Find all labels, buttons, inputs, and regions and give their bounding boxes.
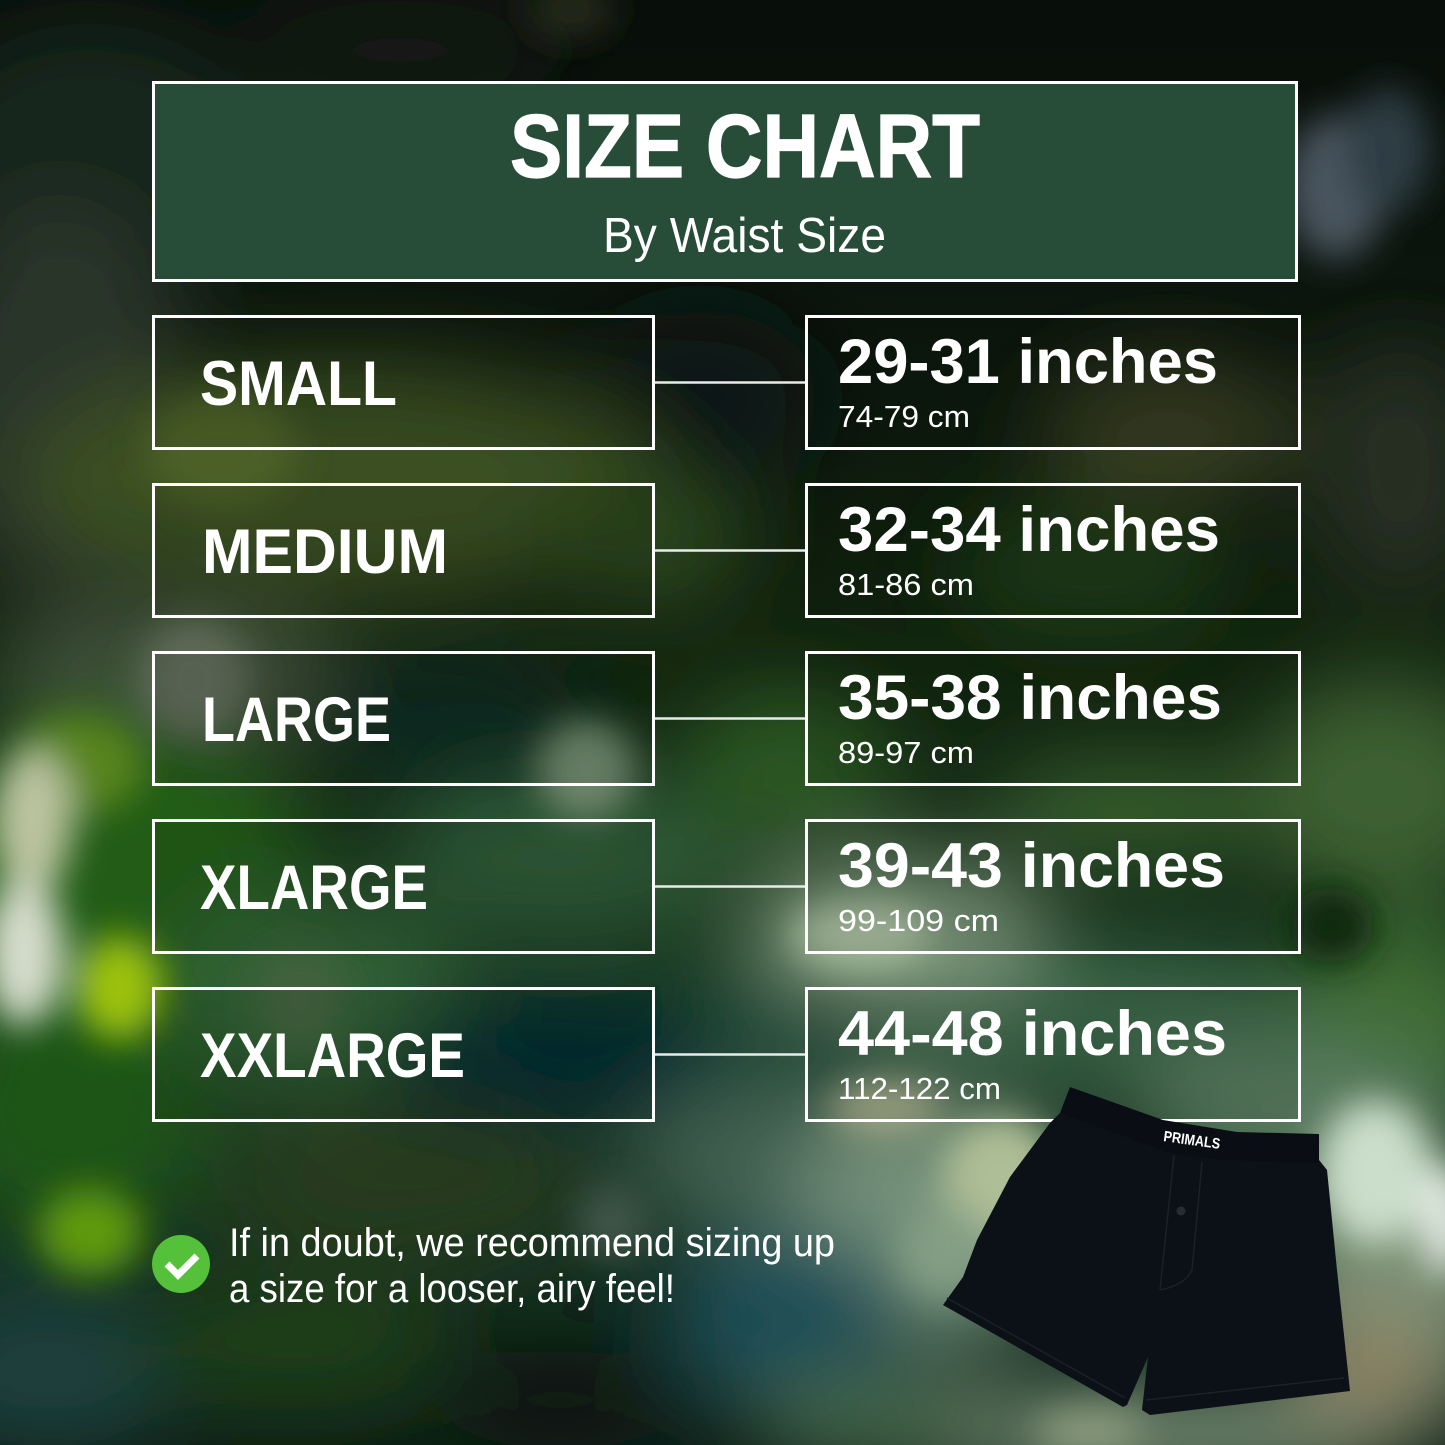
measurement: small: [806, 316, 1300, 448]
size label: xlarge: [154, 820, 654, 952]
product image: black boxer shorts: [943, 1087, 1350, 1415]
sizing advice note: a size for a looser, airy feel!: [229, 1267, 675, 1311]
sizing advice note: If in doubt, we recommend sizing up: [229, 1221, 835, 1265]
sizing advice note: [229, 1221, 835, 1311]
size label: small: SMALL: [200, 349, 397, 419]
size label: xxlarge: XXLARGE: [200, 1021, 465, 1091]
brand label: PRIMALS: [1162, 1128, 1221, 1153]
measurement: xlarge: 99-109 cm: [838, 903, 999, 938]
measurement: xxlarge: 112-122 cm: [838, 1071, 1001, 1106]
size label: xlarge: XLARGE: [200, 853, 428, 923]
header panel: [154, 82, 1296, 280]
row: medium: [154, 484, 1300, 616]
size label: xxlarge: [154, 988, 654, 1120]
measurement: large: 89-97 cm: [838, 735, 974, 770]
measurement: xxlarge: 44-48 inches: [838, 999, 1227, 1069]
measurement: large: 35-38 inches: [838, 663, 1222, 733]
subtitle: By Waist Size: [603, 209, 886, 263]
measurement: medium: [806, 484, 1300, 616]
measurement: xlarge: [806, 820, 1300, 952]
size label: small: [154, 316, 654, 448]
measurement: small: 29-31 inches: [838, 327, 1218, 397]
measurement: xxlarge: [806, 988, 1300, 1120]
title: SIZE CHART: [510, 97, 980, 197]
measurement: medium: 81-86 cm: [838, 567, 974, 602]
size label: large: [154, 652, 654, 784]
measurement: large: [806, 652, 1300, 784]
size label: large: LARGE: [202, 685, 391, 755]
row: xlarge: [154, 820, 1300, 952]
size label: medium: MEDIUM: [202, 517, 448, 587]
icon: green check badge: [152, 1235, 210, 1293]
size label: medium: [154, 484, 654, 616]
row: xxlarge: [154, 988, 1300, 1120]
measurement: medium: 32-34 inches: [838, 495, 1220, 565]
row: small: [154, 316, 1300, 448]
measurement: small: 74-79 cm: [838, 399, 970, 434]
row: large: [154, 652, 1300, 784]
measurement: xlarge: 39-43 inches: [838, 831, 1225, 901]
